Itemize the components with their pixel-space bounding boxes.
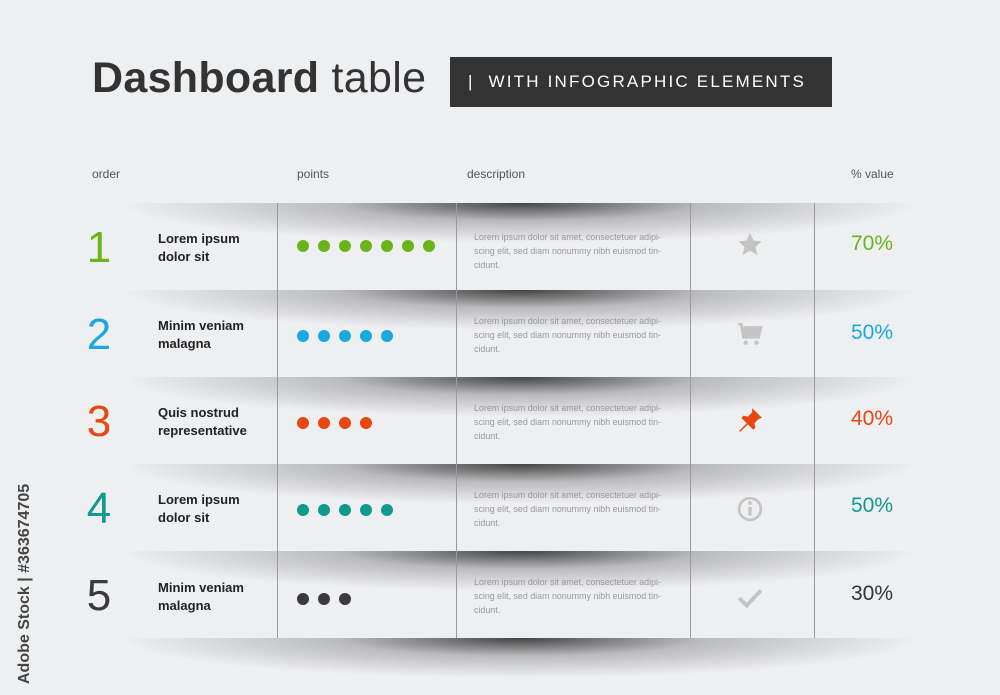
row 2: cidunt. <box>474 344 500 354</box>
row 1: 70% <box>851 232 893 255</box>
row 3: Lorem ipsum dolor sit amet, consectetuer adipi- <box>474 403 661 413</box>
row 4: 4 <box>87 484 111 533</box>
row 1: Lorem ipsum <box>158 231 240 246</box>
row 4: dolor sit <box>158 510 209 525</box>
row 2: 2 <box>87 310 111 359</box>
row 4: Lorem ipsum <box>158 492 240 507</box>
watermark: Adobe Stock | #363674705 <box>16 484 33 684</box>
row 1: dolor sit <box>158 249 209 264</box>
row 2 <box>87 310 893 359</box>
row 5 <box>87 571 893 620</box>
row 4: Lorem ipsum dolor sit amet, consectetuer adipi- <box>474 490 661 500</box>
text: description <box>467 167 525 181</box>
row 5: malagna <box>158 598 211 613</box>
row 4: cidunt. <box>474 518 500 528</box>
row 5: 5 <box>87 571 111 620</box>
title: Dashboard table <box>92 54 426 102</box>
row 3: cidunt. <box>474 431 500 441</box>
text: points <box>297 167 329 181</box>
row 5: Minim veniam <box>158 580 244 595</box>
row 3: 3 <box>87 397 111 446</box>
row 2: Lorem ipsum dolor sit amet, consectetuer adipi- <box>474 316 661 326</box>
row 3: scing elit, sed diam nonummy nibh euismod tin- <box>474 417 661 427</box>
row 1: Lorem ipsum dolor sit amet, consectetuer adipi- <box>474 232 661 242</box>
row 4 <box>87 484 893 533</box>
row 2: malagna <box>158 336 211 351</box>
subtitle box <box>450 57 832 107</box>
row 5: 30% <box>851 582 893 605</box>
row 1 <box>87 223 893 272</box>
row 1: scing elit, sed diam nonummy nibh euismod tin- <box>474 246 661 256</box>
row 4: 50% <box>851 494 893 517</box>
row 1: cidunt. <box>474 260 500 270</box>
row 5: Lorem ipsum dolor sit amet, consectetuer adipi- <box>474 577 661 587</box>
row shadows <box>156 203 884 674</box>
row 5: cidunt. <box>474 605 500 615</box>
row 1: 1 <box>87 223 111 272</box>
row 3: Quis nostrud <box>158 405 239 420</box>
row 2: scing elit, sed diam nonummy nibh euismod tin- <box>474 330 661 340</box>
subtitle box: | WITH INFOGRAPHIC ELEMENTS <box>468 72 806 91</box>
row 5: scing elit, sed diam nonummy nibh euismod tin- <box>474 591 661 601</box>
row 4: scing elit, sed diam nonummy nibh euismod tin- <box>474 504 661 514</box>
row 2: Minim veniam <box>158 318 244 333</box>
column headers: order <box>92 167 120 181</box>
row 2: 50% <box>851 321 893 344</box>
row 3: 40% <box>851 407 893 430</box>
row 3: representative <box>158 423 247 438</box>
row 3 <box>87 397 893 446</box>
text: % value <box>851 167 894 181</box>
